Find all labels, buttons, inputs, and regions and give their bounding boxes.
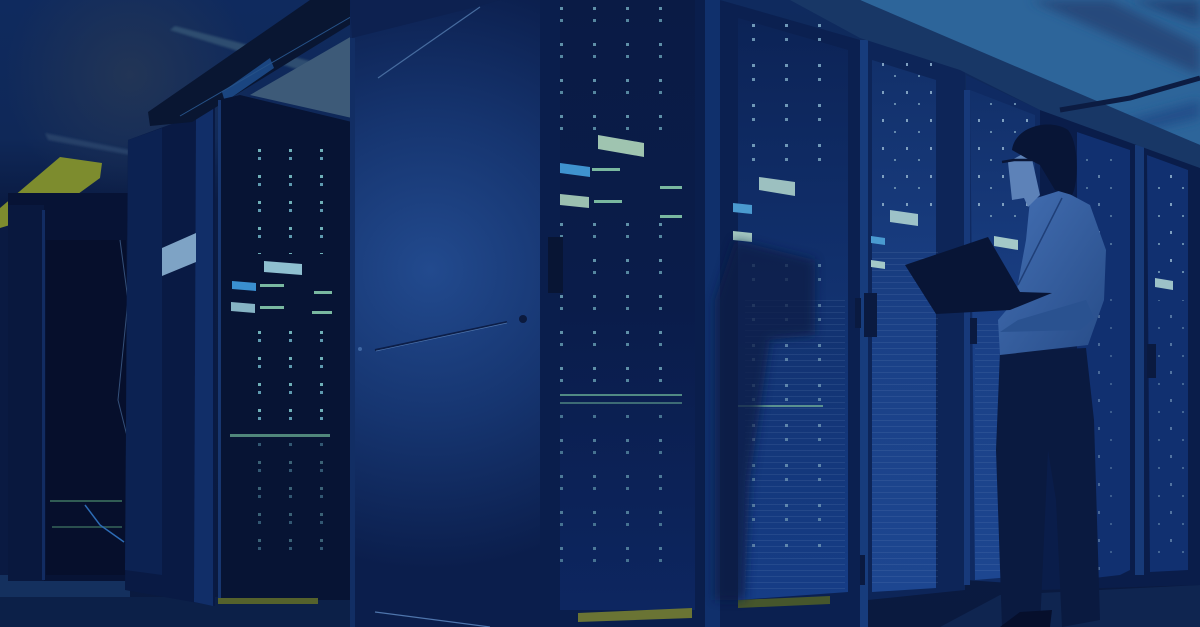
ceiling upper right with blurred beams	[860, 0, 1200, 145]
server rack 4	[855, 38, 965, 600]
yellow cable tray	[0, 157, 102, 228]
laptop	[905, 237, 1052, 314]
hair	[1012, 124, 1077, 195]
glasses	[1002, 160, 1032, 162]
large closed rack door	[350, 0, 540, 627]
technician	[905, 124, 1106, 627]
server rack with status lights	[540, 0, 721, 627]
floor	[0, 575, 1200, 627]
server rack 5	[964, 75, 1040, 585]
left open rack	[0, 193, 128, 581]
shoes	[1000, 610, 1052, 627]
server rack 3	[720, 0, 868, 627]
dark shadow of technician on rack	[715, 240, 815, 600]
top rack frame	[790, 0, 1200, 168]
shirt	[998, 190, 1106, 355]
rack behind door opening	[218, 95, 352, 604]
neck and face	[1008, 150, 1040, 207]
server racks at far right	[1040, 110, 1200, 590]
cable overhead	[1060, 78, 1200, 110]
overhead rail	[148, 0, 390, 126]
open glass door	[125, 106, 215, 606]
trousers	[996, 348, 1100, 627]
